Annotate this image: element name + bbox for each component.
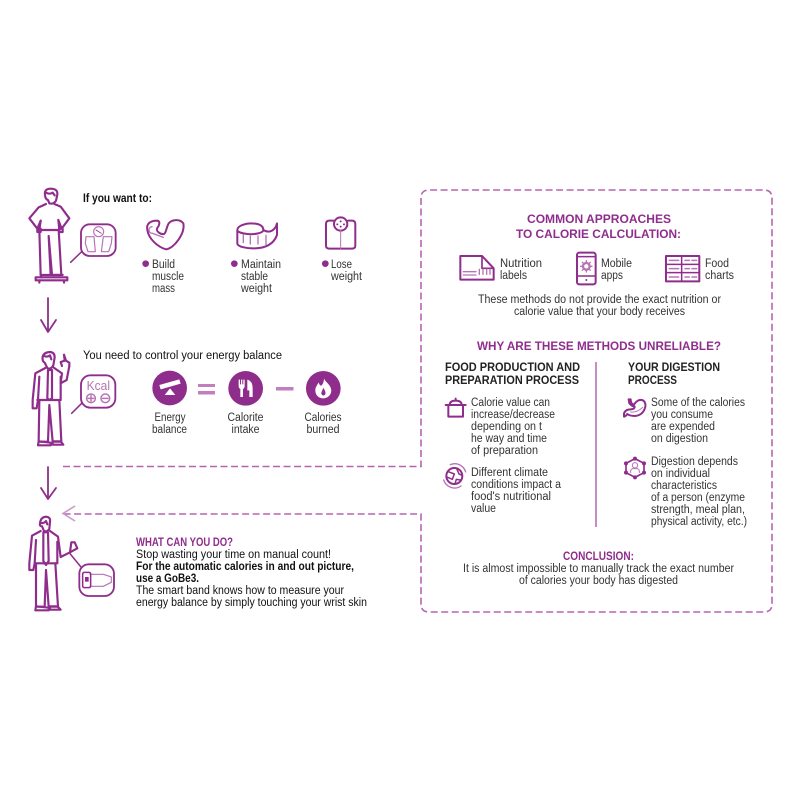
column: digestion: on individual <box>651 468 710 480</box>
arrow down 2 <box>41 467 56 499</box>
column: digestion: characteristics <box>651 480 717 492</box>
column: food production: food's nutritional <box>471 491 551 503</box>
icon: food charts <box>666 256 699 281</box>
column: digestion: of a person (enzyme <box>651 492 745 504</box>
bubble: kcal <box>72 375 115 413</box>
icon: energy balance <box>152 371 187 405</box>
bubble: smart band on wrist <box>70 554 114 596</box>
conclusion: CONCLUSION: <box>563 551 634 563</box>
conclusion: of calories your body has digested <box>519 575 678 587</box>
goal: maintain weight <box>231 223 277 267</box>
column: food production: value <box>471 503 496 515</box>
bubble: scale with feet <box>71 224 116 262</box>
column: food production: PREPARATION PROCESS <box>445 375 579 387</box>
equals sign <box>198 384 215 394</box>
heading: common approaches: TO CALORIE CALCULATION: <box>516 227 681 241</box>
heading: common approaches: COMMON APPROACHES <box>527 212 671 226</box>
column: digestion: you consume <box>651 409 713 421</box>
text: methods note: These methods do not provide the exact nutrition or <box>478 294 721 306</box>
column: digestion: strength, meal plan, <box>651 504 745 516</box>
text: what can you do: WHAT CAN YOU DO? <box>136 537 233 549</box>
column: food production: FOOD PRODUCTION AND <box>445 362 580 374</box>
column: digestion: physical activity, etc.) <box>651 516 747 528</box>
text: Food <box>705 258 729 270</box>
icon: stomach <box>624 399 645 417</box>
dashed panel frame and connectors <box>63 190 772 612</box>
column: food production: depending on t <box>471 421 543 433</box>
column: food production: Calorie value can <box>471 397 550 409</box>
text: methods note <box>478 294 721 318</box>
heading: energy balance: You need to control your energy balance <box>83 350 282 362</box>
labels: energy equation: Calories <box>304 412 342 424</box>
text: charts <box>705 270 734 282</box>
text: Mobile <box>601 258 632 270</box>
minus sign <box>276 387 294 390</box>
icon: calorie intake <box>228 371 263 406</box>
icon: mobile apps <box>577 253 596 284</box>
icon: cooking pot <box>446 399 466 417</box>
icon: nutrition labels <box>460 256 494 280</box>
conclusion: It is almost impossible to manually track the exact number <box>463 563 734 575</box>
heading: why unreliable: WHY ARE THESE METHODS UNRELIABLE? <box>477 339 721 353</box>
column: digestion: YOUR DIGESTION <box>628 362 720 374</box>
column: food production: Different climate <box>471 467 548 479</box>
labels: energy equation: intake <box>232 424 260 436</box>
text: muscle <box>152 271 184 283</box>
column: digestion: Some of the calories <box>651 397 745 409</box>
text: labels <box>500 270 527 282</box>
text: apps <box>601 270 623 282</box>
text: what can you do <box>136 537 367 609</box>
person with smart band <box>29 517 77 610</box>
arrow down 1 <box>41 298 56 332</box>
column: food production: he way and time <box>471 433 547 445</box>
goal: build muscle mass <box>142 220 184 267</box>
heading: common approaches <box>516 212 681 241</box>
labels: energy equation: burned <box>306 424 340 436</box>
labels: energy equation: Calorite <box>228 412 264 424</box>
text: stable <box>241 271 268 283</box>
column: food production: conditions impact a <box>471 479 562 491</box>
heading: if you want to: If you want to: <box>83 193 152 205</box>
column: digestion: on digestion <box>651 433 708 445</box>
column: food production: of preparation <box>471 445 538 457</box>
column: food production: increase/decrease <box>471 409 555 421</box>
text: what can you do: For the automatic calories in and out picture, <box>136 561 354 573</box>
column: food production <box>444 362 580 515</box>
text: methods note: calorie value that your body receives <box>514 306 685 318</box>
text: what can you do: The smart band knows how to measure your <box>136 585 344 597</box>
goal: lose weight <box>322 217 355 267</box>
text: weight <box>330 271 363 283</box>
labels: energy equation: Energy <box>154 412 186 424</box>
labels: energy equation: balance <box>152 424 187 436</box>
text: mass <box>152 283 175 295</box>
text: Lose <box>331 259 352 271</box>
icon: globe <box>444 464 466 488</box>
column: digestion: are expended <box>651 421 715 433</box>
text: what can you do: energy balance by simply touching your wrist skin <box>136 597 367 609</box>
column: digestion: PROCESS <box>628 375 677 387</box>
icon: person network <box>624 457 646 479</box>
text: Nutrition <box>500 258 542 270</box>
labels: energy equation <box>152 412 342 436</box>
text: weight <box>240 283 273 295</box>
text: Build <box>152 259 175 271</box>
icon: calories burned <box>306 371 341 406</box>
text: what can you do: Stop wasting your time on manual count! <box>136 549 331 561</box>
bubble: kcal: Kcal <box>87 378 110 393</box>
person pointing up <box>33 352 69 445</box>
column: digestion: Digestion depends <box>651 456 738 468</box>
text: what can you do: use a GoBe3. <box>136 573 199 585</box>
conclusion <box>463 551 734 587</box>
column: digestion <box>624 362 747 528</box>
person on scale <box>29 189 69 283</box>
text: Maintain <box>241 259 281 271</box>
